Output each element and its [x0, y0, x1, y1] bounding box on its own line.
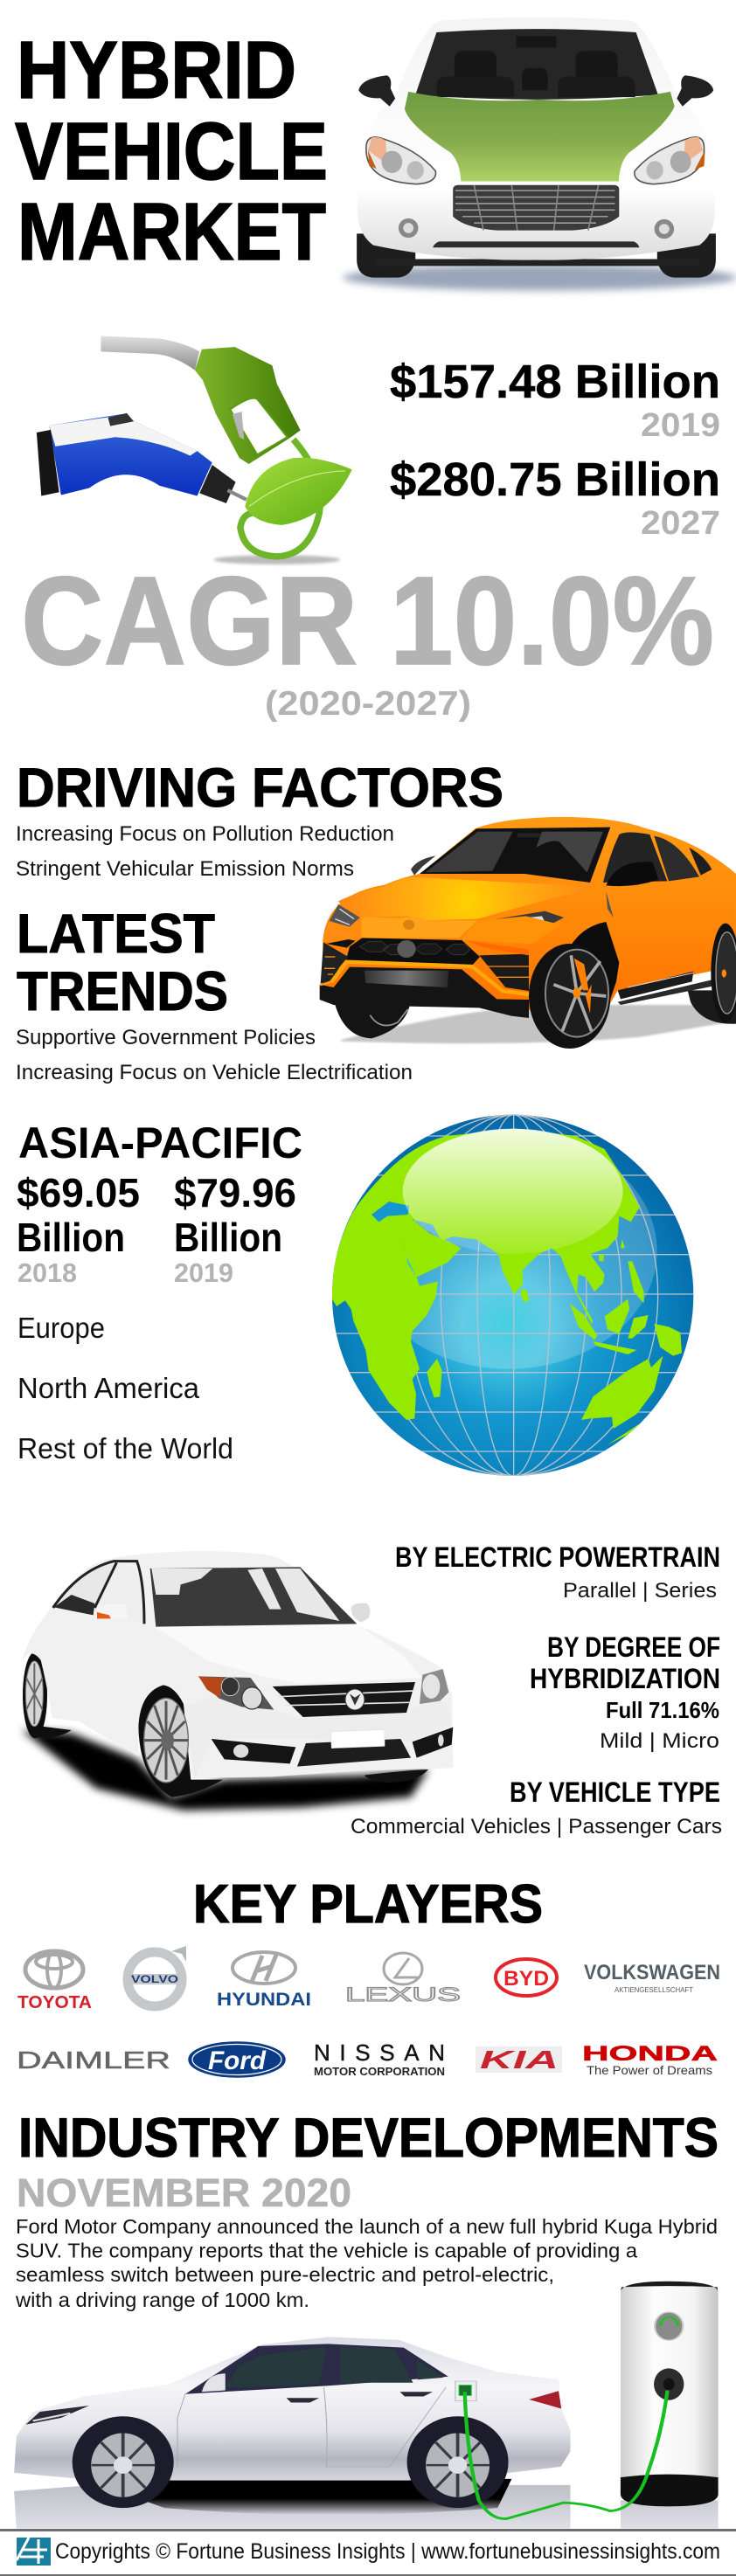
gloss highlight — [403, 1129, 623, 1254]
ground reflection — [14, 2485, 719, 2528]
market size 2019: $157.48 Billion — [390, 356, 720, 408]
logo: Volkswagen: AKTIENGESELLSCHAFT — [614, 1986, 693, 1994]
logo: Toyota: TOYOTA — [17, 1993, 92, 2012]
SUV front fascia — [320, 904, 561, 1038]
segment: by electric powertrain — [395, 1541, 720, 1603]
logo: Volkswagen: VOLKSWAGEN — [584, 1961, 720, 1984]
regional panel: Asia-Pacific: ASIA-PACIFIC — [18, 1118, 302, 1167]
logo: Honda — [582, 2042, 718, 2077]
logo: Honda: HONDA — [582, 2042, 718, 2066]
metal spout — [101, 336, 199, 370]
segment: by degree of hybridization — [530, 1631, 720, 1753]
charging station — [621, 2282, 719, 2506]
regional panel: Asia-Pacific: Billion — [174, 1215, 282, 1260]
heading: driving factors: Stringent Vehicular Emission Norms — [16, 857, 354, 881]
title — [15, 24, 328, 277]
regional panel: Asia-Pacific: 2018 — [17, 1257, 77, 1288]
regional panel: Asia-Pacific: 2019 — [174, 1257, 233, 1288]
regional panel: Asia-Pacific: Europe — [17, 1312, 105, 1344]
regional panel: Asia-Pacific — [17, 1118, 302, 1465]
regional panel: Asia-Pacific: $79.96 — [174, 1170, 296, 1215]
logo: Nissan: MOTOR CORPORATION — [314, 2065, 445, 2078]
heading: latest trends: LATEST — [17, 904, 215, 965]
logo: Volvo: VOLVO — [131, 1973, 178, 1985]
heading: key players: KEY PLAYERS — [193, 1874, 543, 1935]
segment: by vehicle type — [351, 1776, 722, 1839]
logo: Kia — [476, 2046, 562, 2074]
heading: latest trends — [16, 904, 413, 1084]
regional panel: Asia-Pacific: $69.05 — [17, 1170, 140, 1215]
green nozzle body — [195, 347, 301, 464]
text block: development description — [15, 2215, 718, 2311]
logo: Toyota — [17, 1951, 92, 2012]
text block: development description: Ford Motor Company announced the launch of a new full hybrid Kuga Hybrid — [16, 2215, 718, 2238]
market size 2019 — [390, 356, 720, 444]
segment: by vehicle type: Commercial Vehicles | Passenger Cars — [351, 1815, 722, 1839]
logo: BYD — [496, 1959, 557, 1996]
logo: Hyundai — [217, 1952, 311, 2010]
segment: by electric powertrain: Parallel | Series — [563, 1579, 717, 1603]
continents — [331, 1129, 682, 1444]
market size 2027: 2027 — [641, 505, 720, 542]
logo: Lexus: LEXUS — [345, 1984, 461, 2005]
text block: development description: SUV. The company reports that the vehicle is capable of providing a — [16, 2239, 637, 2261]
title: VEHICLE — [15, 106, 328, 197]
fuel hose ring — [240, 440, 321, 557]
logo: Ford — [189, 2042, 285, 2077]
title: MARKET — [17, 186, 326, 277]
logo: Nissan — [314, 2039, 445, 2078]
logo: Hyundai: HYUNDAI — [217, 1990, 311, 2010]
blue EV plug — [49, 414, 212, 496]
logo: Nissan: NISSAN — [314, 2039, 445, 2066]
regional panel: Asia-Pacific: Rest of the World — [17, 1432, 233, 1465]
car body — [14, 2337, 570, 2481]
icon: white sedan — [22, 1551, 453, 1811]
charging cable — [465, 2391, 668, 2518]
CAGR figure: (2020-2027) — [265, 685, 471, 723]
logo: Ford: Ford — [208, 2046, 267, 2075]
icon: orange SUV — [320, 817, 736, 1049]
logo: Daimler: DAIMLER — [17, 2046, 170, 2074]
heading: latest trends: TRENDS — [17, 961, 228, 1022]
market size 2027 — [390, 454, 720, 542]
logo: Kia: KIA — [480, 2046, 559, 2074]
logo: Volvo — [126, 1946, 186, 2006]
icon: fuel nozzle, EV plug and leaf — [37, 336, 352, 564]
text block: development description: with a driving range of 1000 km. — [15, 2289, 309, 2311]
heading: driving factors: Increasing Focus on Pollution Reduction — [16, 822, 394, 846]
market size 2019: 2019 — [641, 407, 720, 444]
SUV body and cabin — [323, 817, 736, 1049]
icon: globe — [328, 1115, 706, 1476]
icon: white car with green hood, front view — [343, 17, 736, 290]
date: November 2020: NOVEMBER 2020 — [17, 2171, 351, 2215]
segment: by degree of hybridization: Mild | Micro — [600, 1729, 719, 1753]
heading: driving factors — [16, 758, 503, 881]
logo: Honda: The Power of Dreams — [587, 2063, 712, 2077]
segment: by degree of hybridization: Full 71.16% — [606, 1697, 719, 1723]
rear wheel — [407, 2416, 509, 2508]
logo: Fortune Business Insights — [17, 2538, 51, 2566]
logos: key players — [17, 1946, 720, 2078]
heading: driving factors: DRIVING FACTORS — [17, 758, 503, 819]
heading: latest trends: Supportive Government Policies — [16, 1026, 316, 1049]
logo: Volkswagen — [584, 1961, 720, 1994]
regional panel: Asia-Pacific: North America — [17, 1372, 200, 1404]
text block: development description: seamless switch between pure-electric and petrol-electric, — [16, 2263, 554, 2286]
footer — [0, 2529, 736, 2576]
front wheel — [73, 2416, 174, 2508]
regional panel: Asia-Pacific: Billion — [17, 1215, 125, 1260]
logo: Lexus — [345, 1953, 461, 2005]
heading: latest trends: Increasing Focus on Vehicle Electrification — [16, 1061, 413, 1084]
green leaf — [245, 458, 352, 525]
title: HYBRID — [17, 24, 296, 115]
illustration: sedan charging at station — [14, 2282, 719, 2528]
logo: BYD: BYD — [503, 1967, 549, 1991]
market size 2027: $280.75 Billion — [390, 454, 720, 506]
